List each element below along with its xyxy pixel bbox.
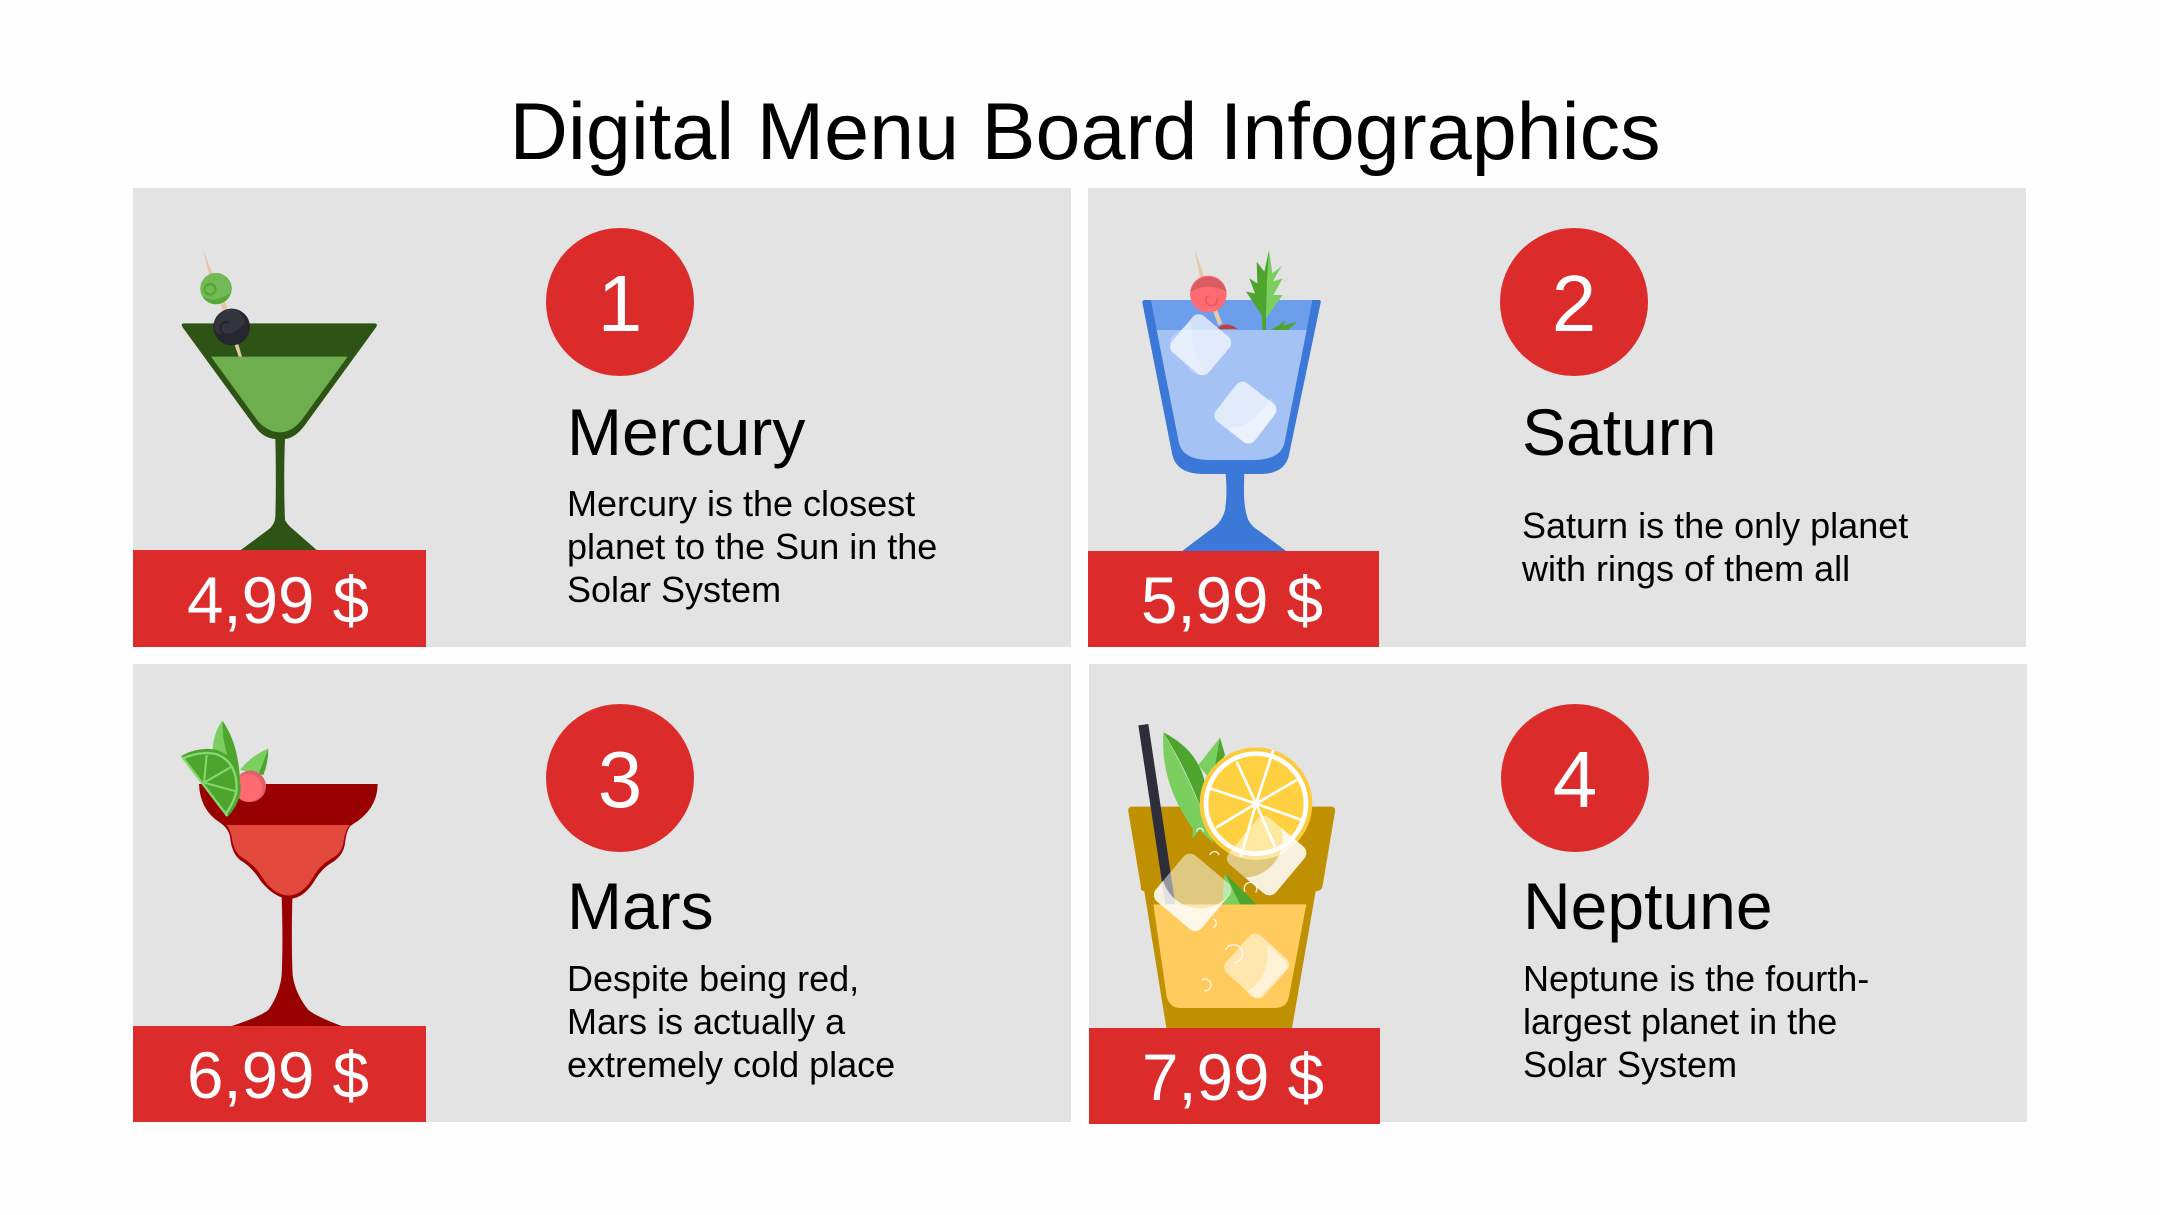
price tag: 7,99 $ [1142,1041,1324,1114]
description [567,958,895,1085]
panel: Mars [133,664,1071,1122]
description: Solar System [567,569,781,610]
description: Solar System [1523,1044,1737,1085]
number badge [1500,228,1648,376]
number badge: 1 [598,259,642,348]
icon: yellow iced drink [1128,724,1336,1028]
number badge: 2 [1552,259,1596,348]
description [567,483,937,610]
description: Saturn is the only planet [1522,505,1908,546]
number badge: 3 [598,735,642,824]
panel: Saturn [1088,188,2026,647]
description: Neptune is the fourth- [1523,958,1869,999]
price tag [133,550,426,647]
price tag [133,1026,426,1122]
number badge [546,704,694,852]
heading: Mercury [567,395,805,469]
heading: Saturn [1522,395,1716,469]
description: extremely cold place [567,1044,895,1085]
description: Mercury is the closest [567,483,915,524]
price tag: 5,99 $ [1141,564,1323,637]
title: Digital Menu Board Infographics [509,87,1661,177]
number badge [1501,704,1649,852]
description: largest planet in the [1523,1001,1837,1042]
price tag: 4,99 $ [187,564,369,637]
description [1522,505,1908,589]
description: Mars is actually a [567,1001,845,1042]
price tag [1089,1028,1380,1124]
panel: Mercury [133,188,1071,647]
description [1523,958,1869,1085]
description: Despite being red, [567,958,859,999]
number badge: 4 [1553,735,1597,824]
icon: blue glass [1142,249,1321,551]
number badge [546,228,694,376]
description: with rings of them all [1522,548,1850,589]
icon: green martini [182,249,377,550]
price tag: 6,99 $ [187,1039,369,1112]
heading: Mars [567,869,714,943]
icon: red margarita [181,720,378,1026]
panel: Neptune [1089,664,2027,1122]
price tag [1088,551,1379,647]
heading: Neptune [1523,869,1773,943]
description: planet to the Sun in the [567,526,937,567]
